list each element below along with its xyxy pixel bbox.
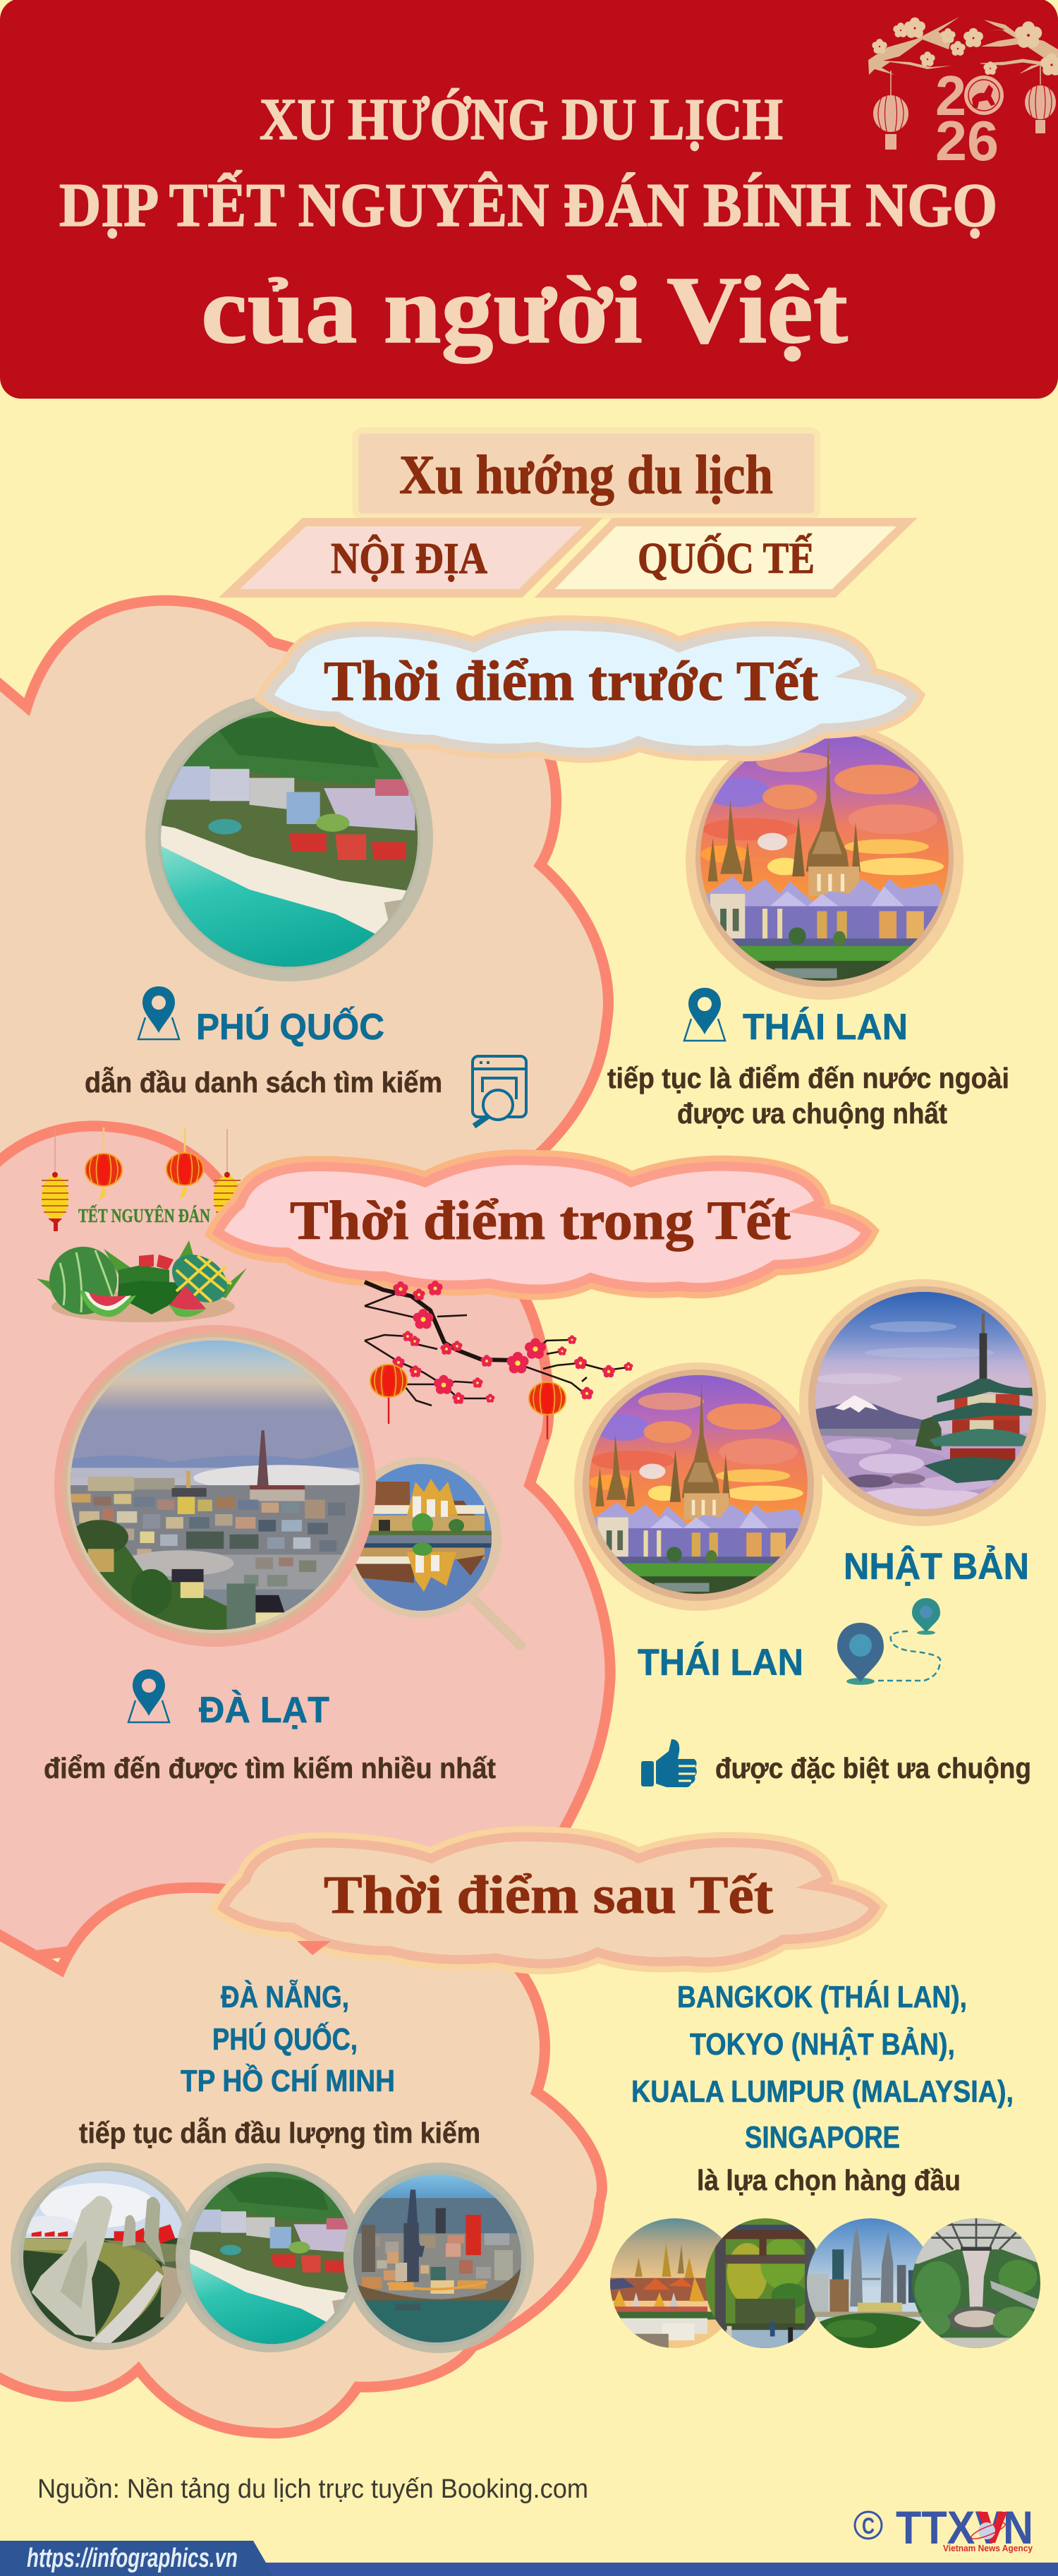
- text: international after Tet: [631, 1979, 1014, 2196]
- label: Thái Lan before Tet: được ưa chuộng nhất: [677, 1097, 947, 1130]
- illustration: Tết lanterns and food: TẾT NGUYÊN ĐÁN: [78, 1204, 210, 1226]
- title cloud: Thời điểm trước Tết: [268, 626, 913, 752]
- photo: Phú Quốc after Tet: [176, 2163, 365, 2352]
- photo: Kuala Lumpur: [807, 2218, 923, 2348]
- panel: before Tet cloud background: [0, 600, 608, 1214]
- label: Thái Lan before Tet: THÁI LAN: [743, 1007, 908, 1048]
- text: international after Tet: TOKYO (NHẬT BẢN),: [690, 2026, 955, 2062]
- photo: Đà Lạt: [54, 1325, 376, 1647]
- icon: search document: [473, 1056, 526, 1126]
- text: domestic after Tet: PHÚ QUỐC,: [212, 2021, 358, 2057]
- decoration: 2026 blossom ornament: 2: [935, 64, 966, 127]
- icon: location pin: [138, 986, 179, 1039]
- heading box: Xu hướng du lịch: Xu hướng du lịch: [399, 444, 773, 505]
- tab: NỘI ĐỊA: NỘI ĐỊA: [331, 535, 487, 583]
- label: Phú Quốc: [85, 986, 442, 1099]
- icon: location pin: [128, 1669, 169, 1722]
- tab: NỘI ĐỊA: [229, 522, 592, 593]
- tab: QUỐC TẾ: QUỐC TẾ: [638, 534, 815, 583]
- label: Đà Lạt: ĐÀ LẠT: [199, 1690, 329, 1731]
- decoration: 2026 blossom ornament: 26: [935, 109, 999, 172]
- title cloud: Thời điểm trước Tết: Thời điểm trước Tết: [324, 651, 818, 713]
- header banner: [0, 0, 1058, 399]
- heading box: Xu hướng du lịch: [355, 430, 817, 516]
- logo: TTXVN: Vietnam News Agency: [943, 2543, 1033, 2553]
- title cloud: Thời điểm trong Tết: Thời điểm trong Tết: [290, 1190, 791, 1251]
- photo: Thái Lan during Tet: [574, 1362, 822, 1611]
- label: Thái Lan during Tet: THÁI LAN: [638, 1641, 803, 1683]
- logo: TTXVN: TTXVN: [896, 2501, 1033, 2553]
- photo: Nhật Bản pagoda: [799, 1279, 1046, 1526]
- text: domestic after Tet: [79, 1979, 480, 2149]
- logo: TTXVN: C: [862, 2513, 875, 2539]
- text: được đặc biệt ưa chuộng: được đặc biệt ưa chuộng: [715, 1752, 1031, 1784]
- title cloud: Thời điểm trong Tết: [218, 1160, 867, 1289]
- title cloud: Thời điểm sau Tết: Thời điểm sau Tết: [324, 1866, 773, 1925]
- photo: magnifier Đà Lạt landmark: [341, 1457, 521, 1645]
- text: domestic after Tet: ĐÀ NẴNG,: [221, 1979, 349, 2014]
- title line 1: XU HƯỚNG DU LỊCH: [260, 87, 783, 152]
- photo: Bangkok: [610, 2218, 722, 2348]
- icon: location pin: [684, 988, 725, 1041]
- decoration: peach blossom branch: [365, 1281, 633, 1439]
- icon: thumbs up: [641, 1739, 697, 1787]
- text: domestic after Tet: tiếp tục dẫn đầu lượng tìm kiếm: [79, 2117, 480, 2149]
- title cloud: Thời điểm sau Tết: [223, 1837, 875, 1964]
- photo: Phú Quốc: [145, 694, 433, 981]
- label: Đà Lạt: điểm đến được tìm kiếm nhiều nhất: [44, 1752, 496, 1784]
- icon: route with two pins: [837, 1598, 940, 1685]
- text: international after Tet: là lựa chọn hàng đầu: [697, 2164, 961, 2196]
- title line 2: DỊP TẾT NGUYÊN ĐÁN BÍNH NGỌ: [59, 169, 997, 240]
- source note: Nguồn: Nền tảng du lịch trực tuyến Booking.com: [37, 2474, 588, 2504]
- panel: after Tet cloud background: [0, 1887, 602, 2433]
- text: international after Tet: BANGKOK (THÁI LAN),: [677, 1979, 967, 2014]
- panel: during Tet cloud background: [0, 1126, 610, 1961]
- label: Nhật Bản: NHẬT BẢN: [844, 1544, 1029, 1588]
- text: international after Tet: SINGAPORE: [745, 2120, 900, 2155]
- illustration: Tết lanterns and food: [37, 1127, 247, 1322]
- label: Thái Lan before Tet: [607, 988, 1009, 1130]
- photo: Thái Lan temple: [686, 722, 963, 1000]
- text: domestic after Tet: TP HỒ CHÍ MINH: [181, 2063, 395, 2098]
- label: Đà Lạt: [44, 1669, 496, 1784]
- footer url: https://infographics.vn: [27, 2544, 238, 2573]
- photo: Tokyo: [705, 2218, 825, 2348]
- photo: Singapore: [912, 2218, 1040, 2348]
- tab: QUỐC TẾ: [545, 522, 907, 593]
- label: Phú Quốc: PHÚ QUỐC: [196, 1006, 384, 1048]
- photo: TP Hồ Chí Minh: [343, 2163, 534, 2353]
- footer bar: [0, 2541, 1058, 2576]
- label: Phú Quốc: dẫn đầu danh sách tìm kiếm: [85, 1066, 442, 1099]
- decoration: 2026 blossom ornament: [868, 17, 1058, 172]
- title line 3: của người Việt: [201, 258, 848, 363]
- label: Thái Lan before Tet: tiếp tục là điểm đến nước ngoài: [607, 1062, 1009, 1094]
- photo: Đà Nẵng: [11, 2163, 198, 2350]
